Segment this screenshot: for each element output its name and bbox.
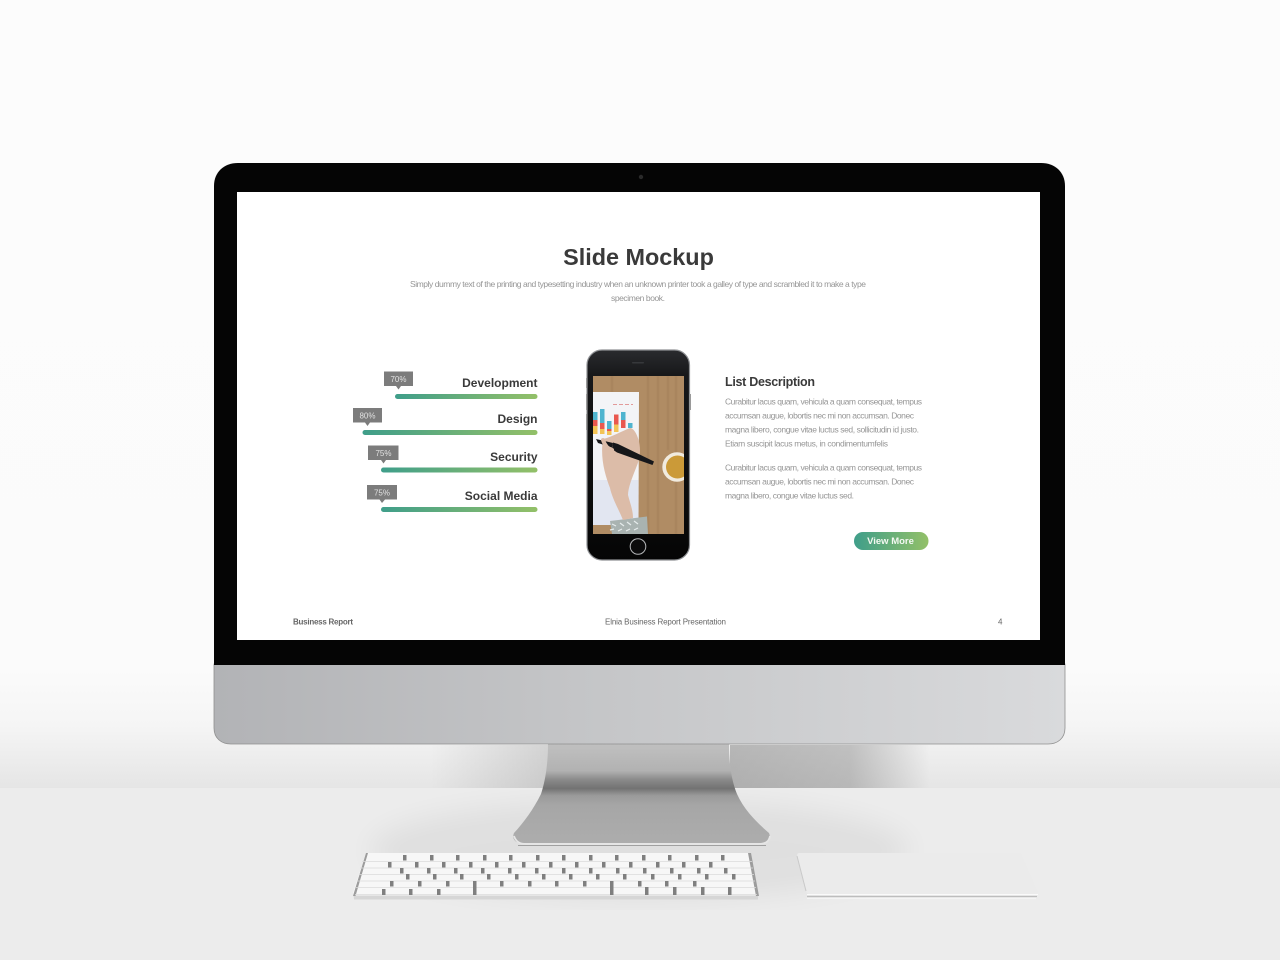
monitor chin bbox=[214, 664, 1065, 744]
trackpad bbox=[797, 853, 1038, 898]
cup bbox=[662, 452, 684, 482]
skill: Development 70% bbox=[384, 372, 538, 399]
hand bbox=[602, 428, 640, 520]
trackpad surface bbox=[797, 853, 1038, 894]
footer: 4 bbox=[998, 618, 1003, 626]
paragraph 2 bbox=[725, 462, 922, 500]
paragraph 1: Etiam suscipit lacus metus, in condimentumfelis bbox=[725, 438, 888, 448]
paragraph 2: magna libero, congue vitae luctus sed. bbox=[725, 490, 854, 500]
paragraph 2: Curabitur lacus quam, vehicula a quam consequat, tempus bbox=[725, 462, 922, 472]
paper bbox=[593, 392, 639, 525]
monitor black bezel bbox=[214, 163, 1065, 665]
skill: Social Media 75%: Social Media bbox=[465, 489, 538, 503]
skill: Social Media 75% bbox=[367, 485, 538, 512]
keyboard bbox=[353, 853, 759, 900]
phone body bbox=[587, 350, 690, 560]
skill: Social Media 75%: 75% bbox=[374, 488, 390, 498]
skill: Security 75%: 75% bbox=[375, 449, 392, 458]
subtitle bbox=[410, 279, 866, 303]
monitor bbox=[214, 163, 1065, 744]
skill: Design 80%: 80% bbox=[359, 412, 376, 420]
sleeve bbox=[610, 516, 648, 534]
skill: Security 75% bbox=[368, 446, 538, 472]
skill bars panel bbox=[353, 372, 538, 512]
webcam bbox=[639, 175, 643, 179]
title: Slide Mockup bbox=[563, 244, 714, 270]
paragraph 1: accumsan augue, lobortis nec mi non accumsan. Donec bbox=[725, 410, 915, 420]
chart bars bbox=[593, 404, 633, 435]
phone photo: desk, chart and hand bbox=[593, 376, 692, 534]
keyboard base bbox=[353, 853, 758, 900]
paragraph 1: Curabitur lacus quam, vehicula a quam consequat, tempus bbox=[725, 396, 922, 406]
subtitle: Simply dummy text of the printing and typesetting industry when an unknown printer took a galley of type and scrambled it to make a type bbox=[410, 279, 866, 289]
home button bbox=[630, 539, 646, 554]
keyboard key gaps bbox=[382, 855, 736, 895]
skill: Development 70%: 70% bbox=[390, 375, 407, 384]
monitor stand bbox=[513, 744, 770, 846]
view more button bbox=[854, 532, 928, 550]
skill: Design 80%: Design bbox=[497, 412, 538, 426]
pen bbox=[596, 439, 613, 448]
paragraph 1: magna libero, congue vitae luctus sed, sollicitudin id justo. bbox=[725, 424, 919, 434]
subtitle: specimen book. bbox=[611, 293, 665, 303]
view more button: View More bbox=[867, 536, 914, 547]
footer: Elnia Business Report Presentation bbox=[605, 618, 726, 626]
skill: Development 70%: Development bbox=[462, 376, 538, 390]
skill: Security 75%: Security bbox=[490, 450, 538, 464]
slide screen bbox=[237, 192, 1040, 640]
phone mockup bbox=[586, 350, 692, 560]
list heading: List Description bbox=[725, 375, 815, 389]
list description bbox=[725, 375, 922, 500]
skill: Design 80% bbox=[353, 408, 538, 435]
footer: Business Report bbox=[293, 618, 353, 626]
paragraph 1 bbox=[725, 396, 922, 448]
paragraph 2: accumsan augue, lobortis nec mi non accumsan. Donec bbox=[725, 476, 915, 486]
footer bbox=[293, 618, 1003, 626]
